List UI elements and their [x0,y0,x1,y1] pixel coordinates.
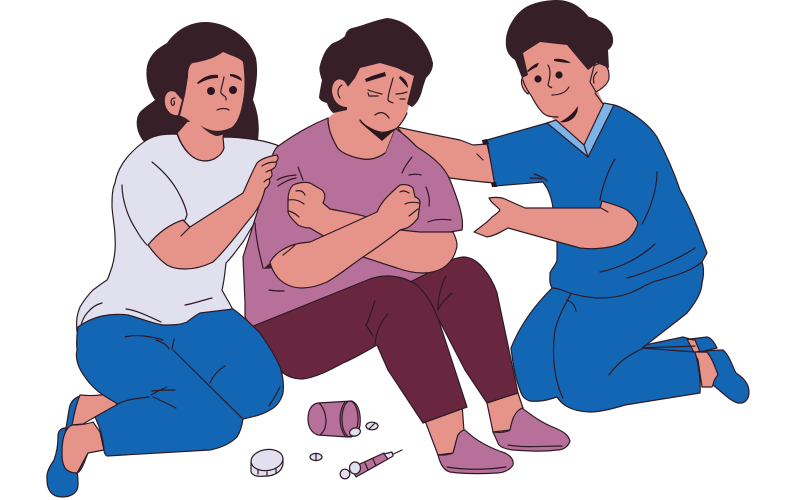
patient ear [332,79,350,107]
patient figure [243,18,570,474]
loose pill on floor [310,453,322,461]
patient front foot and slipper [424,404,513,474]
patient lower arm with left fist [288,182,457,273]
nurse collar [547,103,614,157]
woman eyes and brows [207,87,215,95]
woman trousers [76,309,283,456]
nurse arm reaching to patient shoulder [397,127,496,183]
loose pill right of bottle [366,422,378,430]
woman front foot [47,422,104,497]
pill bottle [308,401,360,437]
nurse eyes, brows, smile [534,75,542,83]
patient neck [328,104,395,159]
woman arm and hand on patient [148,155,278,269]
nurse shoe [695,350,749,403]
woman upper body [77,22,282,345]
bottle cap [250,447,284,476]
patient trousers front leg [251,276,467,423]
patient face [345,58,418,132]
pill in bottle mouth [349,427,361,437]
syringe [340,450,402,479]
nurse face shape [520,38,596,117]
woman back foot [66,393,117,430]
nurse trousers back leg and foot [642,337,718,387]
patient closed eyes, brows, mouth [365,72,408,118]
woman neck and face [165,52,244,161]
spilled medication [250,401,402,479]
woman lower body [47,155,283,497]
nurse left ear [521,76,532,94]
woman white shirt [77,134,282,345]
nurse neck and face [506,0,613,145]
patient back leg [410,257,518,403]
woman ear [165,91,182,115]
nurse figure [397,0,749,412]
nurse right ear [590,64,609,92]
patient hair [319,18,433,113]
nurse hair [506,0,613,78]
nurse forearm and open hand [474,197,638,249]
woman hair [137,22,259,145]
patient shirt [243,118,462,327]
nurse scrub top [487,105,707,298]
nurse trousers [511,262,704,412]
patient back foot and slipper [487,393,570,451]
patient upper crossing arm with right fist [270,185,420,288]
